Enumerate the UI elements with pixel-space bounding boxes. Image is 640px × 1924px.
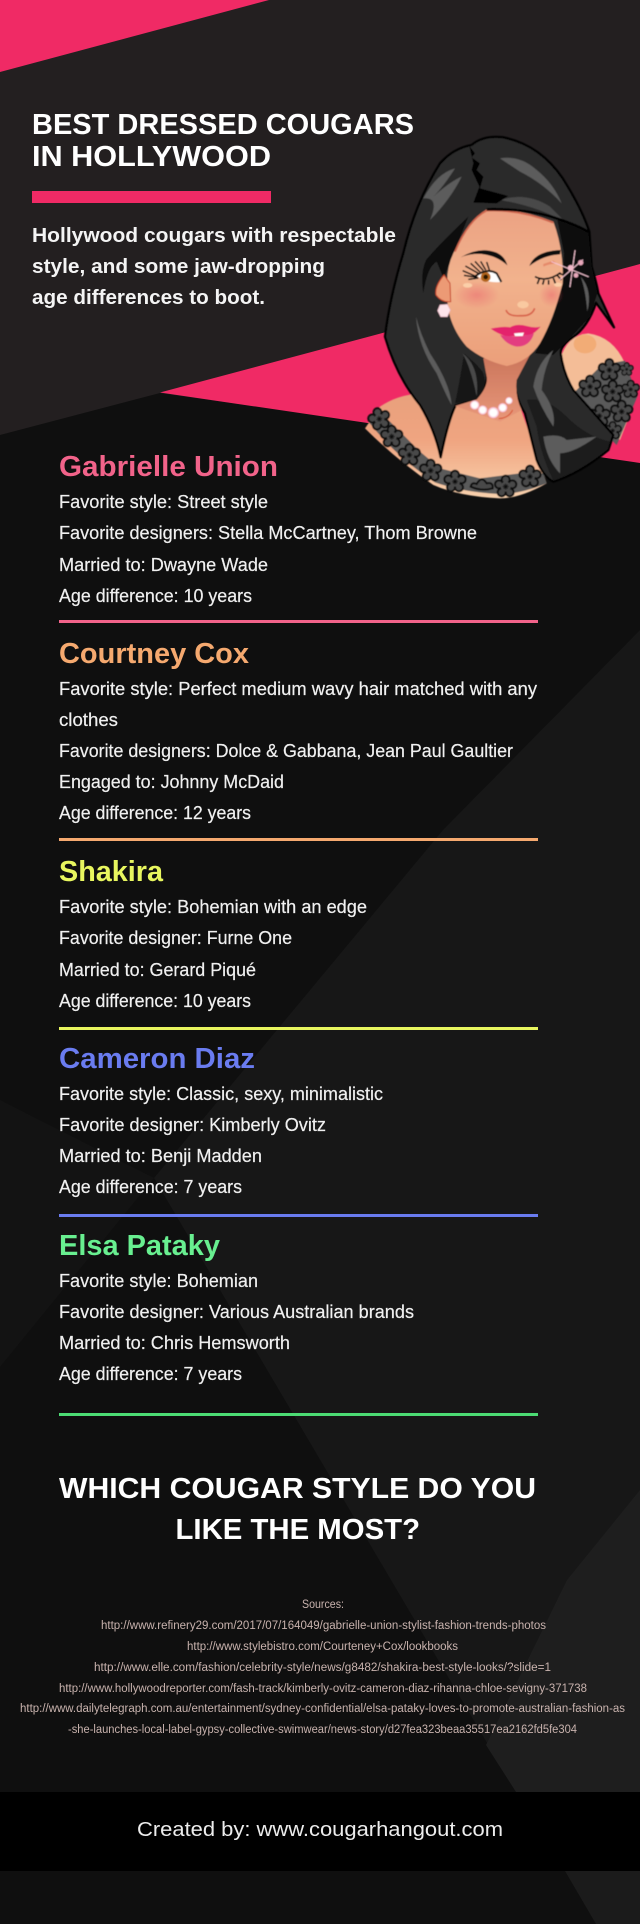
profile: Courtney Cox (59, 638, 538, 823)
title underline bar (32, 191, 271, 203)
eye shadow (543, 261, 557, 267)
call to action question: WHICH COUGAR STYLE DO YOU (59, 1473, 536, 1505)
hairline shadow (455, 211, 553, 252)
hair highlights (416, 158, 597, 473)
ear (436, 275, 451, 302)
details: clothes (59, 709, 118, 730)
hair silhouette (385, 137, 614, 482)
intro text: style, and some jaw-dropping (32, 255, 325, 278)
decorative pink corner (0, 0, 269, 72)
face (447, 209, 563, 366)
details (59, 678, 538, 823)
details: Engaged to: Johnny McDaid (59, 771, 284, 792)
neck (455, 352, 532, 422)
call to action question: LIKE THE MOST? (176, 1514, 420, 1546)
sources: -she-launches-local-label-gypsy-collective-swimwear/news-story/d27fea323beaa35517ea2162fd5fe304 (68, 1724, 578, 1736)
call to action question (59, 1473, 536, 1546)
details: Favorite style: Street style (59, 491, 268, 512)
details: Married to: Gerard Piqué (59, 959, 256, 980)
lower left lock dark edge (455, 353, 485, 403)
details (59, 1083, 383, 1197)
sources: http://www.stylebistro.com/Courteney+Cox/lookbooks (187, 1641, 458, 1653)
details: Favorite designer: Kimberly Ovitz (59, 1114, 326, 1135)
right eye closed (535, 273, 563, 285)
hair sparkle (552, 251, 588, 287)
details: Age difference: 10 years (59, 585, 252, 606)
hair part (469, 146, 508, 203)
sources: http://www.refinery29.com/2017/07/164049/gabrielle-union-stylist-fashion-trends-photos (101, 1620, 546, 1632)
blush right (539, 283, 564, 307)
name: Gabrielle Union (59, 451, 278, 483)
sources: http://www.hollywoodreporter.com/fash-track/kimberly-ovitz-cameron-diaz-rihanna-chloe-sevigny-371738 (59, 1683, 587, 1695)
details: Favorite designers: Dolce & Gabbana, Jean Paul Gaultier (59, 740, 513, 761)
details (59, 896, 367, 1011)
details: Age difference: 7 years (59, 1363, 242, 1384)
details: Married to: Chris Hemsworth (59, 1332, 290, 1353)
intro text: age differences to boot. (32, 286, 265, 309)
left eye (463, 261, 501, 282)
profile: Cameron Diaz (59, 1043, 383, 1197)
intro text (32, 224, 396, 309)
background: lower textured field (0, 393, 640, 1924)
details: Favorite designer: Furne One (59, 927, 292, 948)
details: Age difference: 12 years (59, 802, 251, 823)
intro text: Hollywood cougars with respectable (32, 224, 396, 247)
name: Shakira (59, 856, 164, 888)
black strand left of temple (422, 217, 468, 293)
details (59, 1270, 414, 1384)
background: dark upper field (0, 0, 640, 500)
cheek highlights (463, 283, 562, 288)
name: Elsa Pataky (59, 1230, 220, 1262)
footer band (0, 1792, 640, 1871)
footer credit: Created by: www.cougarhangout.com (137, 1818, 503, 1841)
illustration: woman portrait (365, 137, 639, 498)
necklace (470, 397, 513, 418)
details: Favorite style: Bohemian (59, 1270, 258, 1291)
details: Favorite style: Perfect medium wavy hair matched with any (59, 678, 538, 699)
details: Married to: Benji Madden (59, 1145, 262, 1166)
details: Favorite designers: Stella McCartney, Thom Browne (59, 522, 477, 543)
name: Cameron Diaz (59, 1043, 255, 1075)
details: Age difference: 10 years (59, 990, 251, 1011)
sources: http://www.elle.com/fashion/celebrity-style/news/g8482/shakira-best-style-looks/?slide=1 (94, 1662, 551, 1674)
lace sleeve (575, 359, 639, 445)
earring (438, 304, 450, 317)
shoulders and chest (365, 393, 547, 498)
profile: Gabrielle Union (59, 451, 477, 606)
profile: Elsa Pataky (59, 1230, 414, 1384)
details: Married to: Dwayne Wade (59, 554, 268, 575)
details: Favorite style: Bohemian with an edge (59, 896, 367, 917)
sources (20, 1599, 625, 1736)
details: Favorite designer: Various Australian brands (59, 1301, 414, 1322)
details (59, 491, 477, 606)
title: BEST DRESSED COUGARS (32, 109, 414, 141)
title: IN HOLLYWOOD (32, 141, 271, 173)
nose (506, 301, 535, 316)
name: Courtney Cox (59, 638, 249, 670)
blush left (454, 281, 499, 309)
sources: Sources: (302, 1599, 344, 1611)
right lock inner shade (527, 400, 610, 481)
details: Age difference: 7 years (59, 1176, 242, 1197)
lips (491, 325, 541, 347)
hair crown outline (487, 209, 588, 232)
eyebrows (461, 250, 561, 266)
details: Favorite style: Classic, sexy, minimalistic (59, 1083, 383, 1104)
right shoulder (560, 333, 637, 440)
dark hair beside face (535, 217, 597, 355)
lace neckline (366, 406, 547, 496)
profile: Shakira (59, 856, 367, 1011)
sources: http://www.dailytelegraph.com.au/entertainment/sydney-confidential/elsa-pataky-loves-to-promote-australian-fashion-as (20, 1703, 625, 1715)
pink diagonal band behind portrait (160, 264, 640, 463)
title (32, 109, 414, 173)
